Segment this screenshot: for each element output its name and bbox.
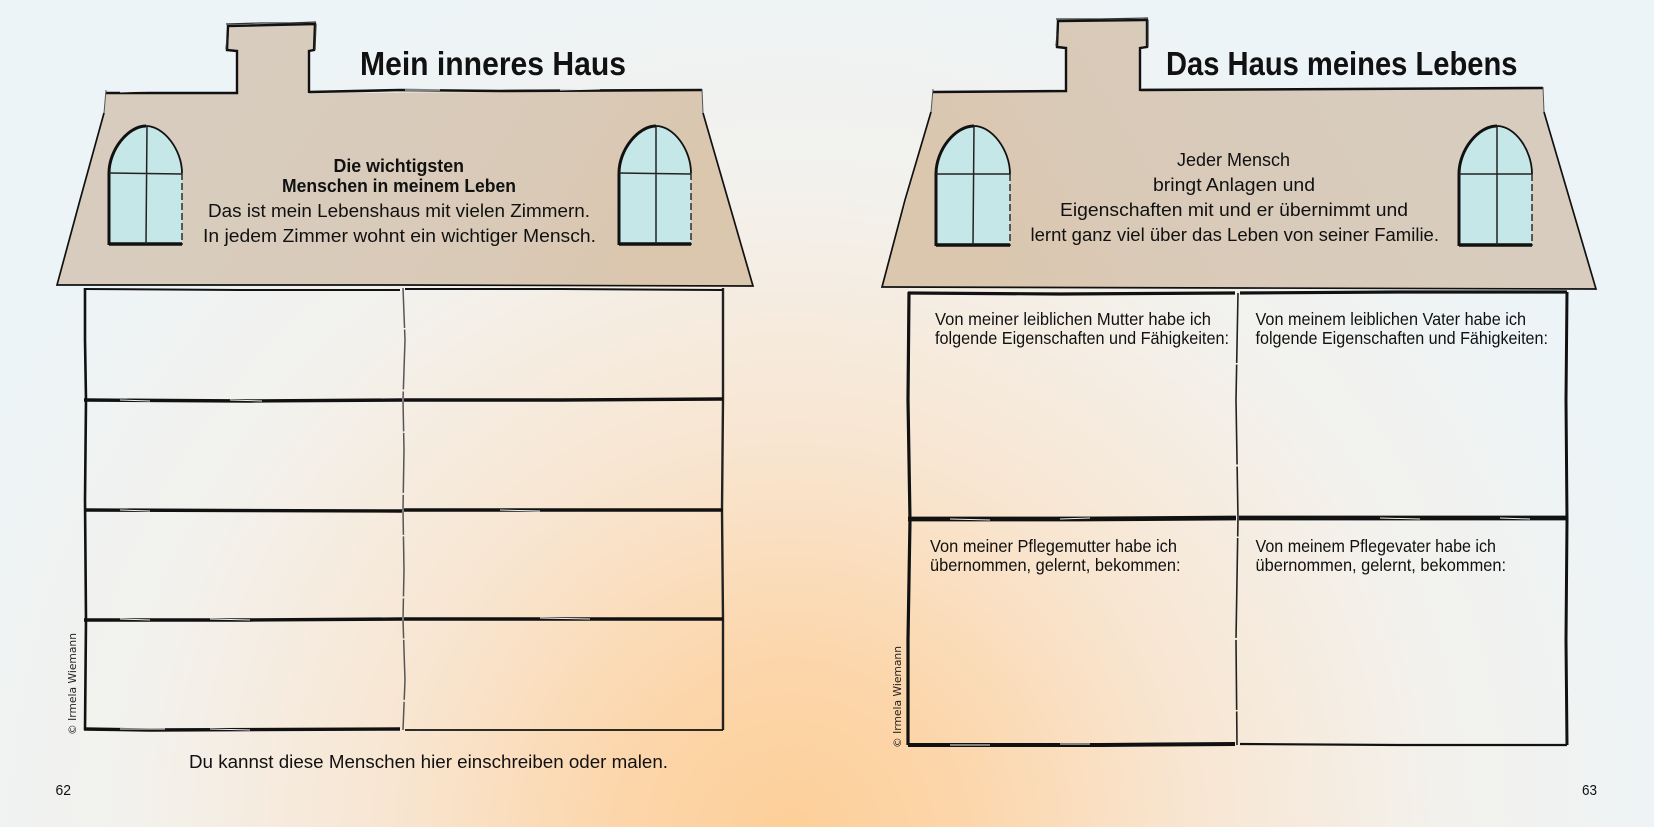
room text: Pflegemutter <box>930 536 1180 575</box>
left roof text: In jedem Zimmer wohnt ein wichtiger Mensch. <box>203 225 596 246</box>
room text: Pflegevater: Von meinem Pflegevater habe ich <box>1256 536 1496 556</box>
left roof text: Menschen in meinem Leben <box>282 175 516 196</box>
right roof text: bringt Anlagen und <box>1153 174 1315 195</box>
right roof with chimney <box>882 18 1596 289</box>
right roof text: Jeder Mensch <box>1177 149 1290 170</box>
right title: Das Haus meines Lebens <box>1166 45 1518 82</box>
room text: Pflegevater: übernommen, gelernt, bekommen: <box>1256 555 1506 575</box>
left roof text <box>203 155 596 246</box>
right copyright: © Irmela Wiemann <box>892 646 904 748</box>
room text: Pflegevater <box>1256 536 1506 575</box>
left roof text: Die wichtigsten <box>334 155 464 176</box>
left house body with rooms <box>84 288 723 730</box>
right house: Das Haus meines Lebens <box>882 18 1597 799</box>
room text: Pflegemutter: übernommen, gelernt, bekommen: <box>930 555 1180 575</box>
left window 2 <box>619 126 691 245</box>
right house body with rooms <box>908 292 1567 745</box>
room text: Pflegemutter: Von meiner Pflegemutter habe ich <box>930 536 1177 556</box>
right page number: 63 <box>1582 782 1597 799</box>
right window 1 <box>936 126 1010 246</box>
left caption: Du kannst diese Menschen hier einschreiben oder malen. <box>189 751 668 772</box>
right roof text <box>1030 149 1439 245</box>
left page number: 62 <box>56 782 71 799</box>
room text: leiblicher Vater: Von meinem leiblichen Vater habe ich <box>1256 309 1526 329</box>
room text: leibliche Mutter: folgende Eigenschaften und Fähigkeiten: <box>935 328 1229 348</box>
left title: Mein inneres Haus <box>360 45 626 82</box>
right roof text: Eigenschaften mit und er übernimmt und <box>1060 199 1408 220</box>
right window 2 <box>1459 126 1532 246</box>
room text: leibliche Mutter <box>935 309 1229 348</box>
room text: leiblicher Vater: folgende Eigenschaften und Fähigkeiten: <box>1256 328 1548 348</box>
room text: leiblicher Vater <box>1256 309 1548 348</box>
left house: Mein inneres Haus <box>56 22 753 799</box>
left window 1 <box>109 126 182 245</box>
left roof with chimney <box>57 22 753 286</box>
left roof text: Das ist mein Lebenshaus mit vielen Zimmern. <box>208 200 590 221</box>
left copyright: © Irmela Wiemann <box>67 633 79 735</box>
room text: leibliche Mutter: Von meiner leiblichen Mutter habe ich <box>935 309 1211 329</box>
right roof text: lernt ganz viel über das Leben von seiner Familie. <box>1030 224 1439 245</box>
